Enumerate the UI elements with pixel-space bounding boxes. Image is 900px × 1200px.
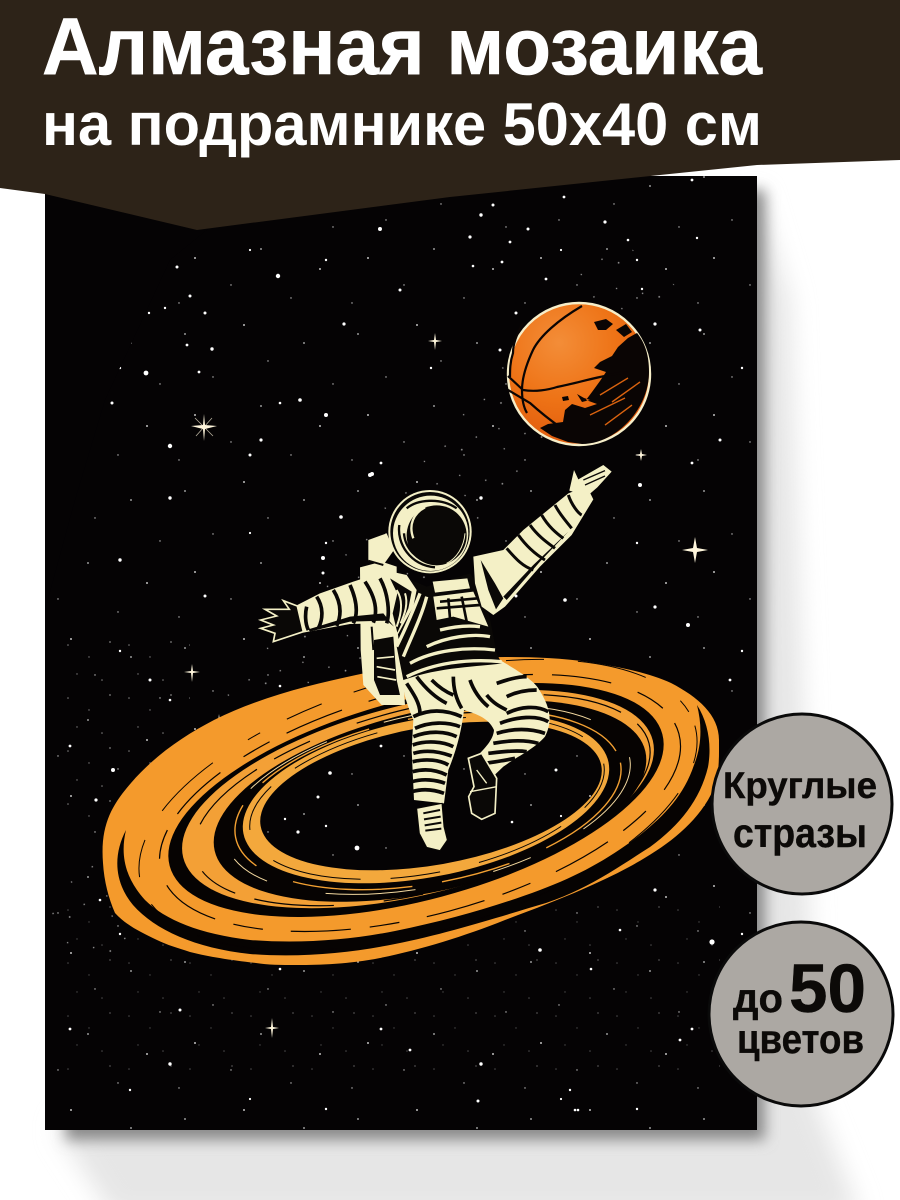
orange ring <box>102 657 719 965</box>
planet dark patches <box>540 319 649 444</box>
backpack <box>360 533 405 705</box>
badge text line 2: стразы <box>733 810 867 856</box>
badge word: цветов: цветов <box>737 1016 864 1062</box>
right glove <box>569 465 612 496</box>
planet orange flecks <box>590 378 640 425</box>
legs <box>403 660 550 803</box>
main black gap <box>168 683 664 917</box>
torso <box>397 573 502 680</box>
badge text line 1: Круглые <box>723 765 877 806</box>
right boot <box>468 753 497 819</box>
title line 1: Алмазная мозаика <box>42 2 763 92</box>
badge: round rhinestones <box>712 714 892 894</box>
badge: up to 50 colours <box>709 922 893 1106</box>
torso highlights <box>397 593 502 677</box>
astronaut <box>261 465 612 851</box>
inner black band <box>214 701 646 902</box>
planet basketball <box>508 303 650 445</box>
left arm shaded underside <box>308 578 412 633</box>
header banner <box>0 0 900 230</box>
left glove <box>261 601 303 642</box>
right arm <box>473 465 612 615</box>
inner ring <box>242 713 610 884</box>
badge number: 50: 50 <box>789 950 866 1027</box>
basketball seams <box>507 305 604 424</box>
leg fold lines <box>412 711 462 793</box>
badge word: до: до <box>733 975 783 1021</box>
near canvas shadow <box>66 190 765 1140</box>
broad canvas shadow <box>57 190 860 1200</box>
thin middle ring <box>182 690 654 908</box>
ring hole <box>260 722 602 870</box>
outer black gap <box>117 705 710 955</box>
sparkle stars <box>184 333 708 1038</box>
ring line detail <box>138 658 698 932</box>
left arm <box>261 571 417 642</box>
title line 2: на подрамнике 50х40 см <box>42 91 762 158</box>
star field <box>30 170 757 1130</box>
right arm shadow streaks <box>481 532 568 609</box>
helmet <box>388 490 472 573</box>
canvas artwork <box>30 170 757 1130</box>
left boot <box>417 803 447 851</box>
